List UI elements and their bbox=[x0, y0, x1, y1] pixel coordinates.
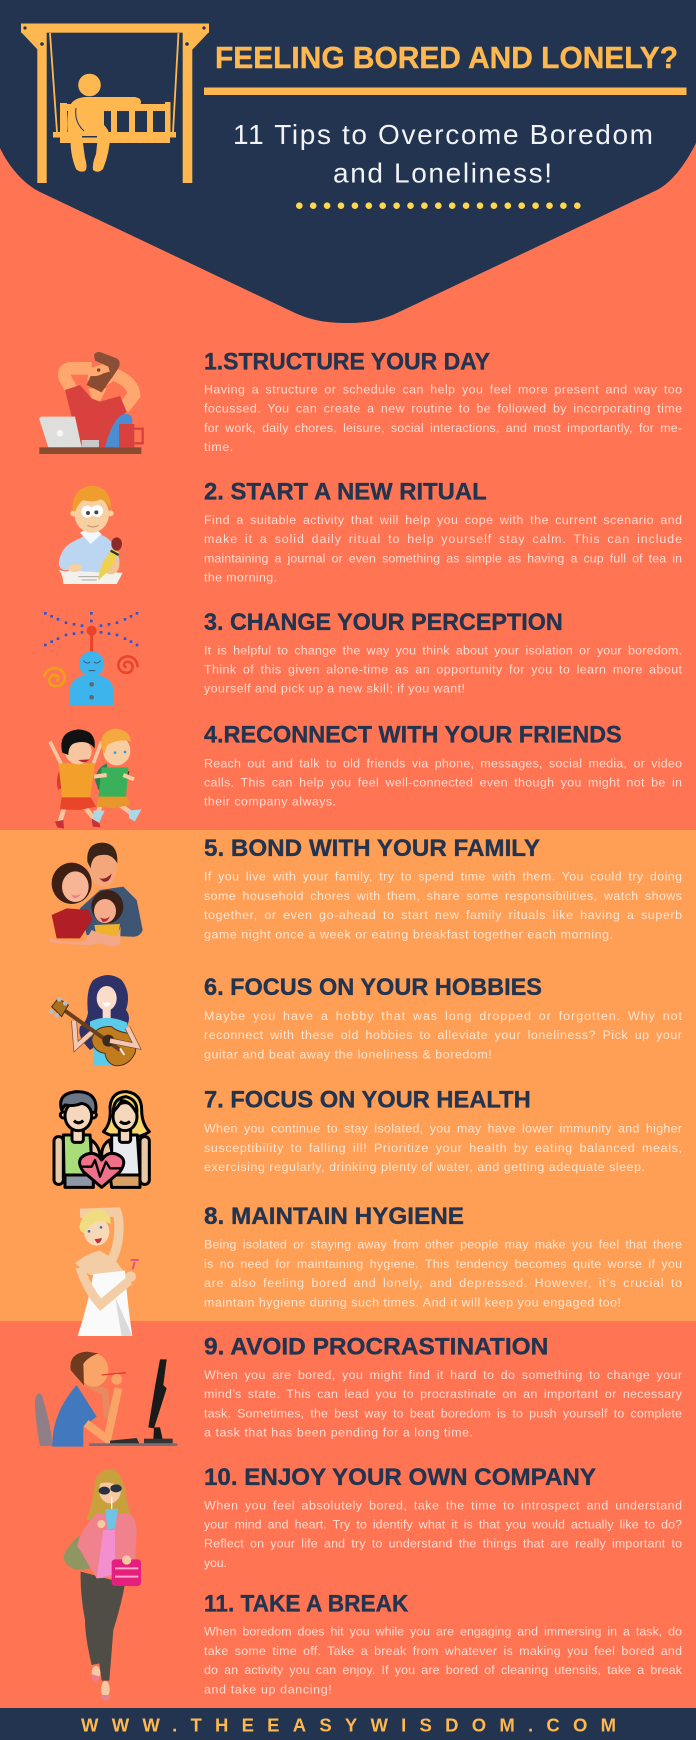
heading: 3. CHANGE YOUR PERCEPTION bbox=[204, 609, 563, 636]
body text bbox=[204, 1238, 682, 1309]
heading: 6. FOCUS ON YOUR HOBBIES bbox=[204, 974, 542, 1001]
subtitle: and Loneliness! bbox=[333, 158, 552, 189]
subtitle: 11 Tips to Overcome Boredom bbox=[233, 119, 653, 150]
tip 10 bbox=[204, 1464, 682, 1570]
body text: together, or even go-ahead to start new family rituals like having a superb bbox=[204, 908, 682, 922]
body text bbox=[204, 1368, 683, 1440]
body text: are also feeling bored and lonely, and depressed. However, it’s crucial to bbox=[204, 1276, 682, 1290]
heading: 5. BOND WITH YOUR FAMILY bbox=[204, 835, 540, 862]
icon: man procrastinating at computer bbox=[35, 1352, 177, 1447]
icon: woman with bags and drink bbox=[63, 1469, 141, 1701]
body text: is no need for maintaining hygiene. This tendency becomes quite worse if you bbox=[204, 1257, 682, 1271]
body text: focussed. You can create a new routine to be followed by incorporating time bbox=[204, 402, 682, 416]
body text: If you live with your family, try to spend time with them. You could try doing bbox=[204, 870, 682, 884]
icon: happy family bbox=[48, 843, 143, 946]
subtitle bbox=[233, 119, 653, 189]
tip 3 bbox=[204, 609, 683, 696]
header panel bbox=[0, 0, 696, 323]
body text bbox=[204, 382, 682, 454]
body text: time. bbox=[204, 440, 233, 454]
body text: and take up dancing! bbox=[204, 1682, 332, 1696]
body text: Reach out and talk to old friends via phone, messages, social media, or video bbox=[204, 756, 682, 770]
body text: susceptibility to falling ill! Prioritize your health by eating balanced meals, bbox=[204, 1141, 682, 1155]
icon: girl playing guitar bbox=[49, 975, 137, 1066]
website address: WWW.THEEASYWISDOM.COM bbox=[81, 1715, 616, 1736]
body text: your mind and heart. Try to identify what it is that you would actually like to do? bbox=[204, 1518, 682, 1532]
heading: 4.RECONNECT WITH YOUR FRIENDS bbox=[204, 722, 622, 749]
body text: Being isolated or staying away from other people may make you feel that there bbox=[204, 1238, 682, 1252]
orange band for tips 5 to 8 bbox=[0, 830, 696, 1321]
heading: 1.STRUCTURE YOUR DAY bbox=[204, 348, 490, 375]
tip 5 bbox=[204, 835, 682, 941]
body text bbox=[204, 870, 682, 941]
body text bbox=[204, 1122, 682, 1174]
tip 11 bbox=[204, 1590, 683, 1696]
icon: two friends walking bbox=[50, 729, 141, 829]
heading: 7. FOCUS ON YOUR HEALTH bbox=[204, 1087, 531, 1114]
body text bbox=[204, 643, 683, 696]
heading: 2. START A NEW RITUAL bbox=[204, 478, 487, 505]
footer bar bbox=[0, 1708, 696, 1740]
body text bbox=[204, 1009, 683, 1061]
body text: guitar and beat away the loneliness & boredom! bbox=[204, 1047, 492, 1061]
title: FEELING BORED AND LONELY? bbox=[215, 40, 678, 75]
heading: 11. TAKE A BREAK bbox=[204, 1590, 409, 1617]
body text: task. Sometimes, the best way to beat boredom is to push yourself to complete bbox=[204, 1406, 682, 1420]
body text: When you are bored, you might find it hard to do something to change your bbox=[204, 1368, 682, 1382]
body text: maintaining a journal or even something as simple as having a cup full of tea in bbox=[204, 551, 682, 565]
footer background bbox=[0, 1708, 696, 1740]
icon: person on porch swing bbox=[21, 24, 209, 183]
body text: yourself and pick up a new skill; if you want! bbox=[204, 682, 465, 696]
tip 7 bbox=[204, 1087, 682, 1174]
icon: woman in towel bbox=[75, 1209, 139, 1336]
body text: mind’s state. This can lead you to procrastinate on an important or necessary bbox=[204, 1387, 683, 1401]
body text: Reflect on your life and try to understand the things that are really important to bbox=[204, 1537, 682, 1551]
title rule bbox=[204, 88, 686, 95]
body text: Maybe you have a hobby that was long dropped or forgotten. Why not bbox=[204, 1009, 683, 1023]
dotted divider bbox=[296, 202, 581, 209]
body text bbox=[204, 1498, 682, 1570]
body text: a task that has been pending for a long time. bbox=[204, 1426, 473, 1440]
body text: Having a structure or schedule can help you feel more present and way too bbox=[204, 382, 682, 396]
icon: boy writing bbox=[58, 486, 123, 584]
body text: you. bbox=[204, 1556, 227, 1570]
body text: When you feel absolutely bored, take the time to introspect and understand bbox=[204, 1498, 682, 1512]
body text: It is helpful to change the way you think about your isolation or your boredom. bbox=[204, 643, 682, 657]
body text: make it a solid daily ritual to help yourself stay calm. This can include bbox=[204, 532, 682, 546]
icon: couple with heartbeat heart bbox=[54, 1092, 149, 1187]
body text: Think of this given alone-time as an opportunity for you to learn more about bbox=[204, 662, 683, 676]
tip 8 bbox=[204, 1203, 682, 1309]
body text: When boredom does hit you while you are engaging and immersing in a task, do bbox=[204, 1625, 682, 1639]
body text: calls. This can help you feel well-connected even though you might not be in bbox=[204, 776, 682, 790]
tip 2 bbox=[204, 478, 682, 585]
body text: some household chores with them, share some responsibilities, watch shows bbox=[204, 889, 682, 903]
tip 1 bbox=[204, 348, 682, 454]
heading: 8. MAINTAIN HYGIENE bbox=[204, 1203, 464, 1230]
body text: When you continue to stay isolated, you may have lower immunity and higher bbox=[204, 1122, 682, 1136]
tip 9 bbox=[204, 1333, 683, 1440]
body text: their company always. bbox=[204, 795, 336, 809]
body text: the morning. bbox=[204, 571, 277, 585]
body text: reconnect with these old hobbies to alleviate your loneliness? Pick up your bbox=[204, 1028, 682, 1042]
header navy shape bbox=[0, 0, 696, 323]
body text: exercising regularly, drinking plenty of water, and getting adequate sleep. bbox=[204, 1160, 645, 1174]
heading: 10. ENJOY YOUR OWN COMPANY bbox=[204, 1464, 596, 1491]
icon: meditating figure bbox=[44, 612, 138, 706]
body text bbox=[204, 756, 682, 809]
body text: maintain hygiene during such times. And it will keep you engaged too! bbox=[204, 1295, 621, 1309]
body text: game night once a week or eating breakfast together each morning. bbox=[204, 927, 613, 941]
body text: for work, daily chores, leisure, social interactions, and most importantly, for me- bbox=[204, 421, 682, 435]
body text bbox=[204, 513, 682, 585]
body text bbox=[204, 1625, 683, 1696]
body text: do an activity you can enjoy. If you are bored of cleaning utensils, take a break bbox=[204, 1663, 683, 1677]
body text: Find a suitable activity that will help you cope with the current scenario and bbox=[204, 513, 682, 527]
heading: 9. AVOID PROCRASTINATION bbox=[204, 1333, 548, 1360]
body text: take some time off. Take a break from whatever is making you feel bored and bbox=[204, 1644, 682, 1658]
icon: man thinking at laptop bbox=[39, 352, 143, 454]
tip 6 bbox=[204, 974, 683, 1061]
tip 4 bbox=[204, 722, 682, 809]
